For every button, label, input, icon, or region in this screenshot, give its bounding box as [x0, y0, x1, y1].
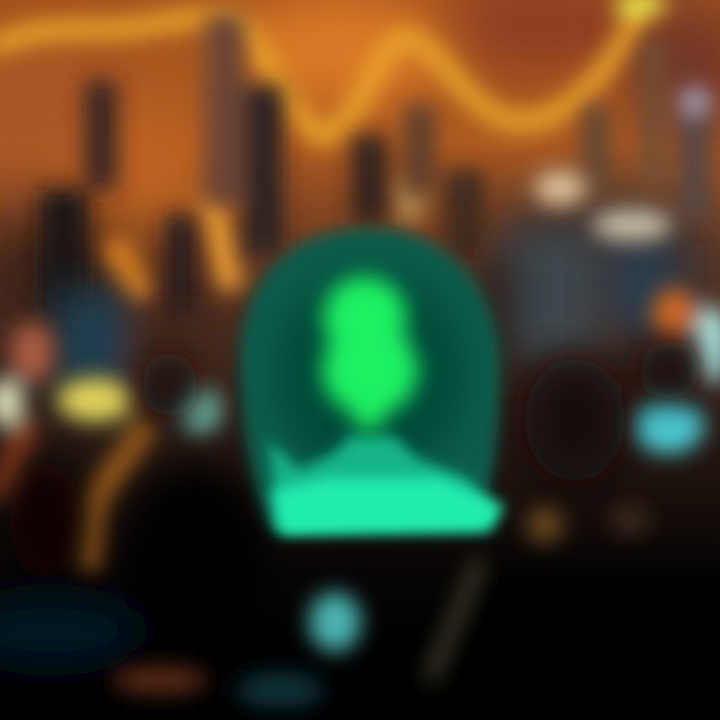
shield dome — [240, 228, 500, 530]
city lights — [0, 86, 720, 570]
foreground crowd silhouettes — [0, 340, 720, 720]
glowing green shield — [240, 228, 505, 535]
shield base bright band — [272, 478, 505, 535]
foreground warm and teal accents — [112, 506, 650, 708]
yellow wavy trend line — [0, 0, 666, 300]
skyline towers — [40, 15, 710, 335]
shield inner shading — [275, 270, 465, 480]
mid-distance buildings — [55, 235, 675, 390]
shield base upper glow — [268, 436, 490, 530]
sky colour glows — [0, 0, 720, 340]
small teal orb — [309, 592, 361, 652]
central figure — [322, 276, 418, 429]
